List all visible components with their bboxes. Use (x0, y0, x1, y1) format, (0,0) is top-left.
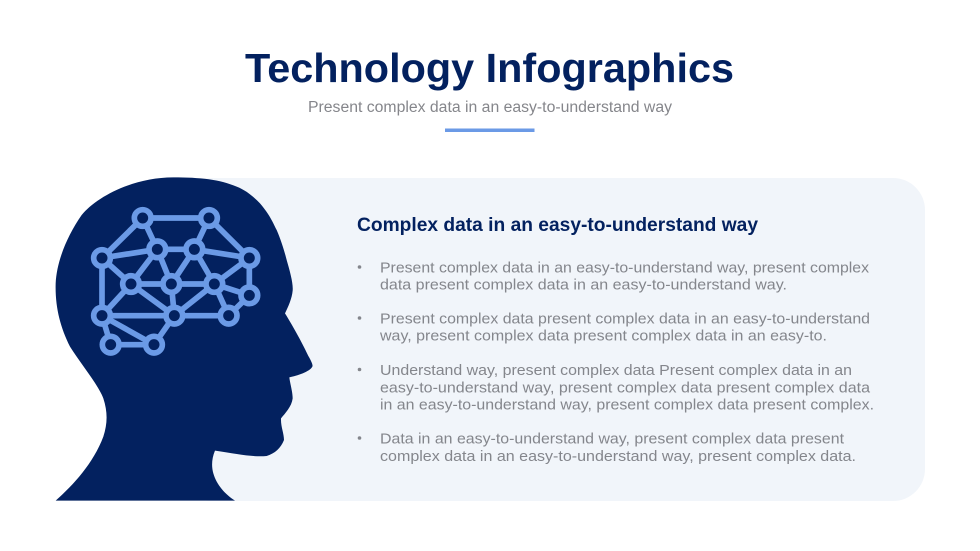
panel: background (180, 178, 925, 501)
bullet 2 (358, 310, 870, 344)
bullet 1: data present complex data in an easy-to-understand way. (380, 276, 787, 294)
title: Technology Infographics (245, 45, 734, 91)
bullet 1: Present complex data in an easy-to-understand way, present complex (380, 260, 870, 276)
bullet 2: way, present complex data present complex data in an easy-to. (379, 328, 827, 344)
panel heading: Complex data in an easy-to-understand way (357, 215, 758, 236)
bullet 4: complex data in an easy-to-understand way, present complex data. (380, 448, 856, 465)
bullet 2: Present complex data present complex data in an easy-to-understand (380, 310, 870, 328)
bullet 4: Data in an easy-to-understand way, present complex data present (380, 430, 845, 448)
network links (102, 218, 249, 345)
network nodes (94, 210, 258, 353)
bullet 3 (358, 362, 874, 414)
bullet 1 (358, 260, 870, 294)
accent bar (445, 128, 534, 132)
subtitle: Present complex data in an easy-to-understand way (308, 99, 672, 116)
bullet 4 (358, 430, 856, 465)
bullet 3: in an easy-to-understand way, present complex data present complex. (380, 396, 874, 414)
icon: head silhouette with neural network (56, 177, 313, 501)
bullet 3: easy-to-understand way, present complex data present complex data (380, 380, 871, 396)
bullet 3: Understand way, present complex data Present complex data in an (380, 362, 852, 379)
head silhouette (56, 177, 313, 501)
